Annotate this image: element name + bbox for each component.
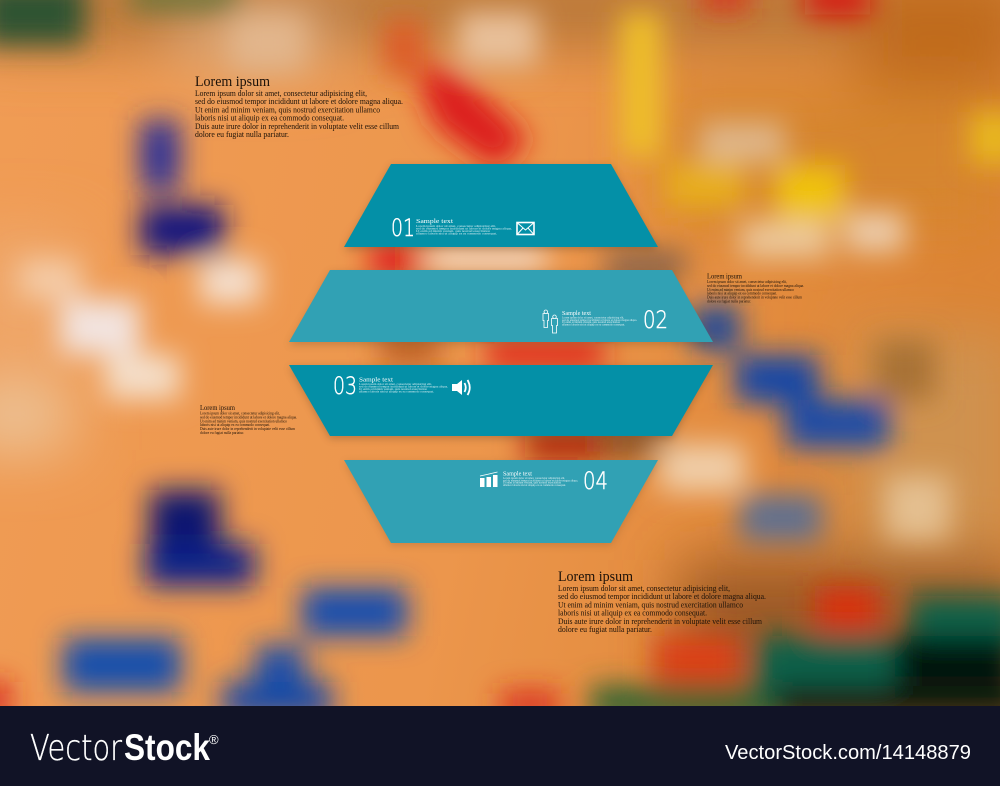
top left text block — [195, 74, 403, 139]
panel: segment 01: Ut enim ad minim veniam, quis nostrud exercitation — [416, 229, 491, 233]
panel: segment 01: sed do eiusmod tempor incididunt ut labore et dolore magna aliqua. — [416, 226, 512, 230]
panel: segment 01: ullamco laboris nisi ut aliquip ex ea commodo consequat. — [416, 232, 497, 236]
bottom text block: sed do eiusmod tempor incididunt ut labore et dolore magna aliqua. — [558, 592, 766, 601]
left small text block: dolore eu fugiat nulla pariatur. — [200, 431, 244, 435]
panel: segment 03: 03 — [333, 372, 357, 400]
right small text block: Lorem ipsum dolor sit amet, consectetur adipisicing elit, — [707, 280, 787, 285]
panel: segment 04: 04 — [583, 467, 608, 495]
top left text block: Lorem ipsum dolor sit amet, consectetur adipisicing elit, — [195, 89, 367, 98]
top left text block: Duis aute irure dolor in reprehenderit in voluptate velit esse cillum — [195, 122, 400, 131]
top left text block: dolore eu fugiat nulla pariatur. — [195, 130, 289, 139]
left small text block: Lorem ipsum — [200, 404, 236, 412]
left small text block: Duis aute irure dolor in reprehenderit in voluptate velit esse cillum — [200, 427, 295, 431]
panel: segment 03 — [289, 365, 713, 439]
panel: segment 03: Lorem ipsum dolor sit amet, consectetur adipisicing elit, — [359, 382, 432, 386]
right small text block: Ut enim ad minim veniam, quis nostrud exercitation ullamco — [707, 288, 794, 293]
footer bar — [0, 706, 1000, 786]
panel: segment 04: ullamco laboris nisi ut aliquip ex ea commodo consequat. — [503, 484, 566, 487]
left small text block: laboris nisi ut aliquip ex ea commodo consequat. — [200, 423, 270, 427]
panel: segment 03: sed do eiusmod tempor incididunt ut labore et dolore magna aliqua. — [359, 384, 448, 388]
panel: segment 01: Sample text — [416, 218, 453, 225]
VectorStock logo: Stock — [124, 727, 210, 768]
right small text block: laboris nisi ut aliquip ex ea commodo consequat. — [707, 292, 777, 296]
icon: envelope — [517, 222, 534, 234]
icon: two people — [543, 310, 558, 333]
top left text block: sed do eiusmod tempor incididunt ut labore et dolore magna aliqua. — [195, 97, 403, 106]
panel: segment 01: Lorem ipsum dolor sit amet, consectetur adipisicing elit, — [416, 224, 496, 228]
icon: bar chart — [480, 472, 498, 487]
panel: segment 02 — [289, 270, 713, 345]
panel: segment 04: Lorem ipsum dolor sit amet, consectetur adipisicing elit, — [503, 477, 565, 480]
icon: speaker — [452, 380, 470, 395]
right small text block — [707, 272, 804, 304]
panel: segment 04: Sample text — [503, 472, 532, 478]
panel: segment 02: Lorem ipsum dolor sit amet, consectetur adipisicing elit, — [562, 316, 624, 320]
bottom text block: Ut enim ad minim veniam, quis nostrud exercitation ullamco — [558, 600, 743, 609]
panel: segment 03: Sample text — [359, 378, 393, 384]
VectorStock logo: ® — [209, 732, 219, 747]
panel: segment 01 — [344, 164, 658, 250]
panel: segment 03: Ut enim ad minim veniam, quis nostrud exercitation — [359, 387, 428, 391]
right small text block: sed do eiusmod tempor incididunt ut labore et dolore magna aliqua. — [707, 284, 804, 288]
panel: segment 02: Sample text — [562, 311, 591, 317]
right small text block: dolore eu fugiat nulla pariatur. — [707, 300, 751, 304]
left small text block: Ut enim ad minim veniam, quis nostrud exercitation ullamco — [200, 419, 287, 424]
left small text block: sed do eiusmod tempor incididunt ut labore et dolore magna aliqua. — [200, 415, 297, 419]
VectorStock logo — [30, 727, 219, 769]
panel: segment 02: 02 — [643, 306, 668, 334]
bottom text block: dolore eu fugiat nulla pariatur. — [558, 625, 652, 634]
panel: segment 01: 01 — [391, 214, 415, 242]
bottom text block: laboris nisi ut aliquip ex ea commodo consequat. — [558, 609, 707, 618]
VectorStock logo: Vector — [30, 728, 122, 769]
bottom text block: Duis aute irure dolor in reprehenderit in voluptate velit esse cillum — [558, 617, 763, 626]
image id: VectorStock.com/14148879 — [725, 742, 971, 764]
top left text block: Lorem ipsum — [195, 74, 271, 90]
top left text block: laboris nisi ut aliquip ex ea commodo consequat. — [195, 114, 344, 123]
top left text block: Ut enim ad minim veniam, quis nostrud exercitation ullamco — [195, 105, 380, 114]
panel: segment 03: ullamco laboris nisi ut aliquip ex ea commodo consequat. — [359, 390, 434, 394]
bottom text block — [558, 569, 766, 634]
left small text block — [200, 404, 297, 435]
right small text block: Duis aute irure dolor in reprehenderit in voluptate velit esse cillum — [707, 296, 802, 300]
panel: segment 02: Ut enim ad minim veniam, quis nostrud exercitation — [562, 321, 621, 324]
panel: segment 02: ullamco laboris nisi ut aliquip ex ea commodo consequat. — [562, 323, 625, 326]
panel: segment 02: sed do eiusmod tempor incididunt ut labore et dolore magna aliqua. — [562, 319, 637, 322]
panel: segment 04 — [344, 460, 658, 546]
left small text block: Lorem ipsum dolor sit amet, consectetur adipisicing elit, — [200, 412, 280, 416]
panel: segment 04: sed do eiusmod tempor incididunt ut labore et dolore magna aliqua. — [503, 479, 578, 482]
panel: segment 04: Ut enim ad minim veniam, quis nostrud exercitation — [503, 482, 562, 485]
bottom text block: Lorem ipsum dolor sit amet, consectetur adipisicing elit, — [558, 584, 730, 593]
right small text block: Lorem ipsum — [707, 272, 743, 280]
bottom text block: Lorem ipsum — [558, 569, 634, 585]
